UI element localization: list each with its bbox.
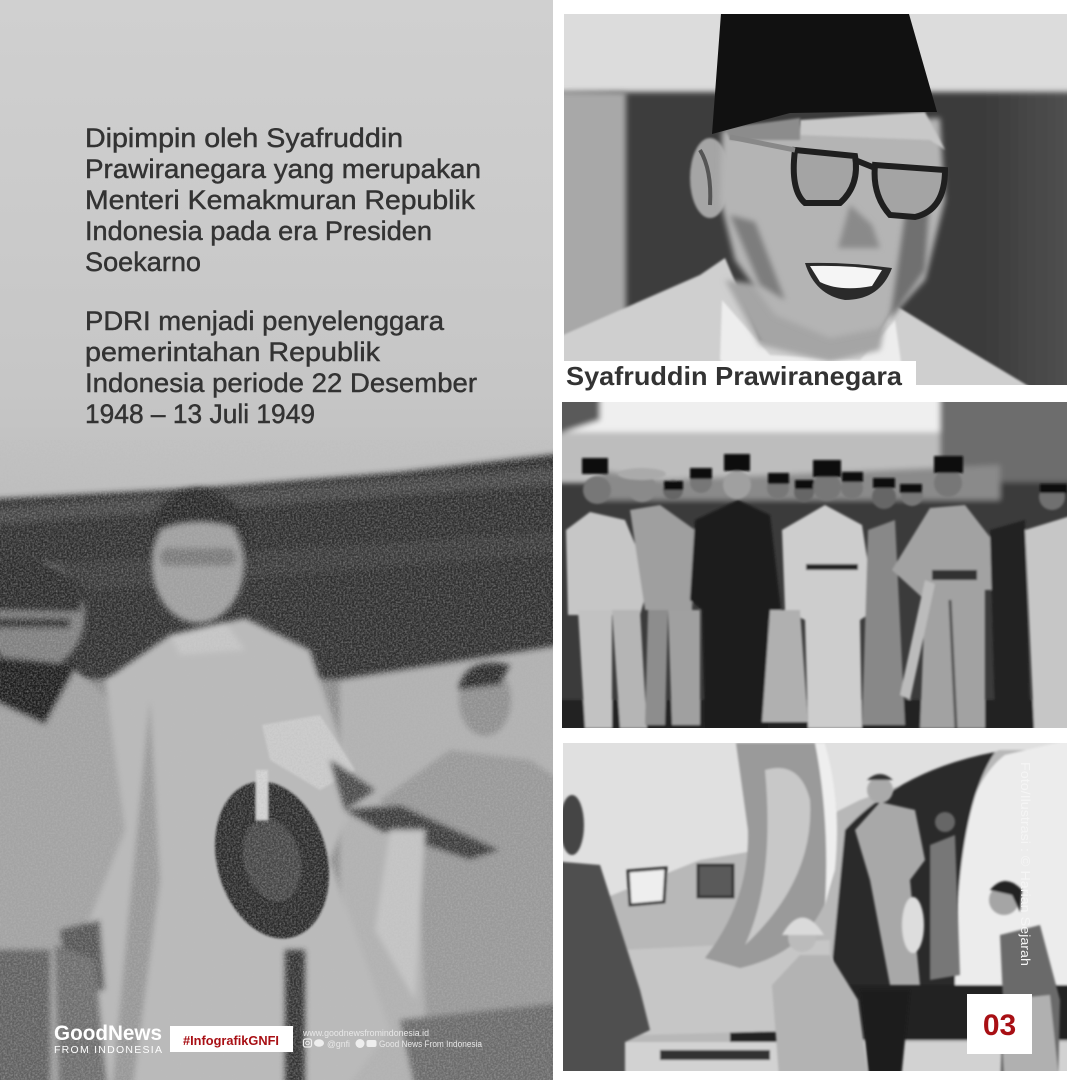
icon: instagram xyxy=(304,1039,312,1047)
photo: group of soldiers and officials xyxy=(562,402,1067,728)
caption: Syafruddin Prawiranegara: Syafruddin Prawiranegara xyxy=(566,361,903,391)
face xyxy=(720,118,945,338)
social links xyxy=(302,1028,482,1049)
social links: Good News From Indonesia xyxy=(379,1039,482,1049)
man with pith helmet on stairs xyxy=(772,918,910,1080)
text block: PDRI period: 1948 – 13 Juli 1949 xyxy=(85,399,315,429)
open door xyxy=(705,743,837,968)
icon: youtube xyxy=(366,1040,376,1047)
man with stick xyxy=(892,505,1002,728)
text block: PDRI period: Indonesia periode 22 Desember xyxy=(85,368,477,398)
background man at right xyxy=(328,658,553,1018)
neck xyxy=(725,280,890,362)
social links: @gnfi xyxy=(327,1039,350,1049)
dark suited man xyxy=(690,500,781,728)
ear xyxy=(690,138,730,218)
photo: Syafruddin Prawiranegara portrait xyxy=(564,14,1067,385)
social links: www.goodnewsfromindonesia.id xyxy=(302,1028,429,1038)
hashtag badge: #InfografikGNFI xyxy=(183,1033,279,1048)
panel: left background photo of airfield group xyxy=(0,0,590,1080)
white uniform man xyxy=(782,505,875,728)
smile xyxy=(805,263,892,300)
man on left with glasses xyxy=(0,560,126,1080)
man at right in profile xyxy=(989,881,1060,1080)
figures in doorway xyxy=(855,774,960,985)
page number badge: 03 xyxy=(983,1009,1016,1042)
middle figure xyxy=(862,520,905,725)
glasses xyxy=(730,137,945,217)
photo: leaders disembarking from aircraft xyxy=(563,743,1067,1071)
black peci hat xyxy=(712,14,937,134)
hashtag badge xyxy=(170,1026,293,1052)
text block: leader description: Indonesia pada era Presiden xyxy=(85,216,432,246)
text block: leader description: Prawiranegara yang merupakan xyxy=(85,154,481,184)
logo: GoodNews From Indonesia: FROM INDONESIA xyxy=(54,1044,162,1056)
black hat in hand xyxy=(213,716,354,940)
icon: twitter xyxy=(314,1039,324,1047)
dark landscape band xyxy=(0,450,590,1080)
text block: PDRI period: PDRI menjadi penyelenggara xyxy=(85,306,445,336)
text block: leader description: Soekarno xyxy=(85,247,201,277)
icon: facebook xyxy=(356,1039,364,1048)
text block: leader description: Dipimpin oleh Syafruddin xyxy=(85,123,403,153)
shirt xyxy=(540,258,1035,390)
text block: leader description: Menteri Kemakmuran Republik xyxy=(85,185,476,215)
aircraft fuselage xyxy=(610,743,1067,1071)
ground and bottom shadows xyxy=(0,950,590,1080)
figure on left, back turned xyxy=(563,794,652,1071)
right figures xyxy=(990,520,1030,720)
photo credit: Foto/Ilustrasi : © Harian Sejarah xyxy=(1018,762,1032,966)
central smiling man in white suit xyxy=(52,484,345,1080)
figure left xyxy=(566,512,650,615)
page number badge xyxy=(967,994,1032,1054)
text block: PDRI period xyxy=(85,306,477,429)
group of standing figures xyxy=(562,452,1067,728)
film grain xyxy=(0,440,553,1080)
text block: PDRI period: pemerintahan Republik xyxy=(85,337,381,367)
extra heads xyxy=(663,480,683,500)
logo: GoodNews From Indonesia xyxy=(54,1022,162,1056)
logo: GoodNews From Indonesia: GoodNews xyxy=(54,1022,162,1045)
text block: leader description xyxy=(85,123,481,277)
sky and trees xyxy=(562,402,1067,702)
figure 2 xyxy=(630,505,695,610)
